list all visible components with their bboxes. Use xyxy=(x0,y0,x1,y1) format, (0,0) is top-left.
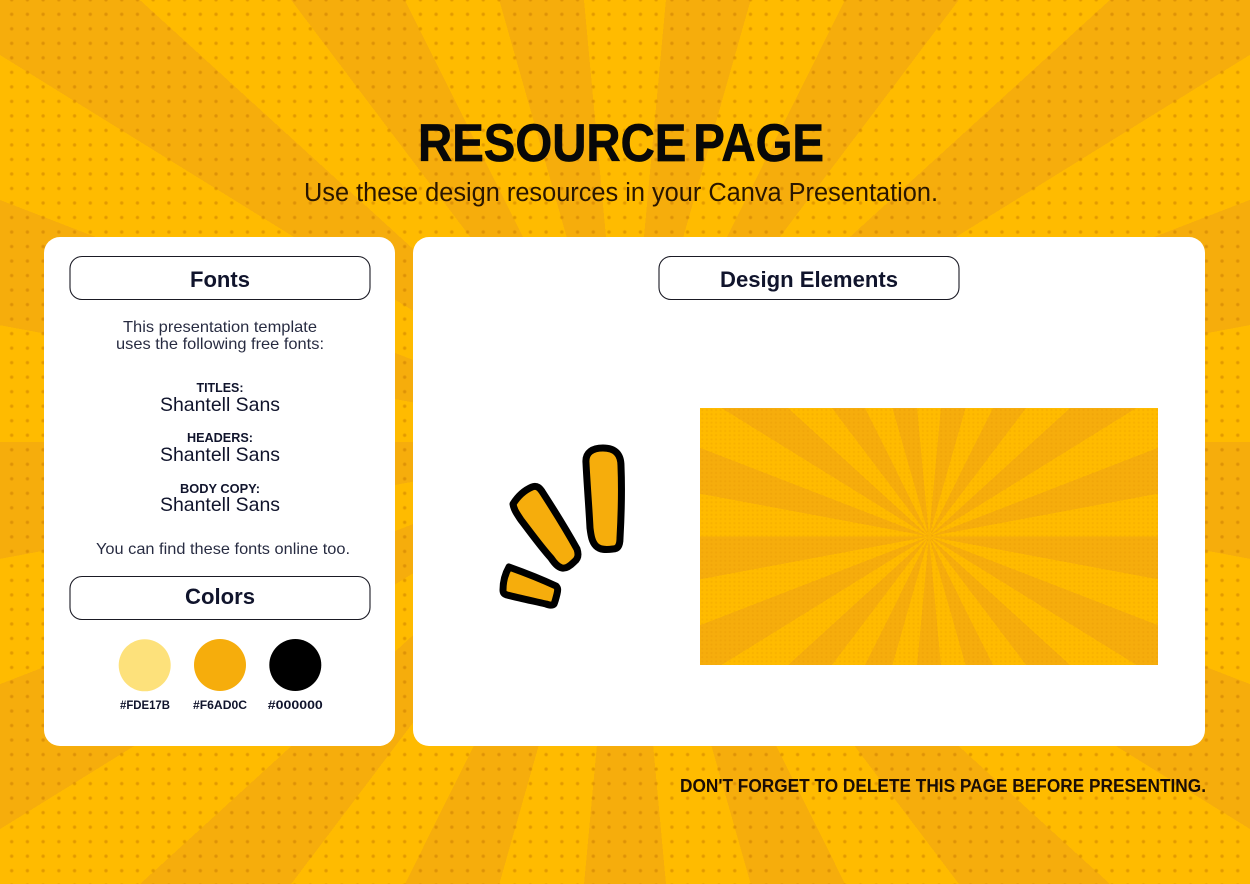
text: body copy font: Shantell Sans xyxy=(160,494,280,516)
text: titles font: Shantell Sans xyxy=(160,394,280,416)
title block xyxy=(304,114,938,207)
panel: fonts and colors xyxy=(44,237,395,746)
swatch: light yellow xyxy=(119,639,171,712)
heading: fonts: Fonts xyxy=(190,267,250,292)
text: titles font: TITLES: xyxy=(196,381,244,395)
text: fonts intro: This presentation template xyxy=(123,319,317,336)
swatch: orange xyxy=(193,639,247,712)
text: titles font xyxy=(160,381,280,416)
footer note: DON'T FORGET TO DELETE THIS PAGE BEFORE PRESENTING. xyxy=(680,776,1206,796)
sunburst design element xyxy=(700,408,1158,665)
heading: fonts xyxy=(70,256,370,300)
text: body copy font: BODY COPY: xyxy=(180,482,260,496)
swatch: black: #000000 xyxy=(268,700,323,712)
text: headers font: Shantell Sans xyxy=(160,444,280,466)
heading: colors: Colors xyxy=(185,584,255,609)
text: fonts note: You can find these fonts online too. xyxy=(96,541,350,558)
subtitle: Use these design resources in your Canva Presentation. xyxy=(304,179,938,207)
swatch: black xyxy=(268,639,323,712)
panel: design elements xyxy=(413,237,1205,746)
title: RESOURCE PAGE xyxy=(418,114,824,173)
swatch: orange: #F6AD0C xyxy=(193,700,247,712)
heading: design elements xyxy=(658,256,960,300)
swatch: light yellow: #FDE17B xyxy=(120,700,170,712)
heading: colors xyxy=(70,576,370,620)
text: headers font xyxy=(160,431,280,466)
text: body copy font xyxy=(160,482,280,516)
text: headers font: HEADERS: xyxy=(187,431,253,445)
text: fonts intro: uses the following free fonts: xyxy=(116,336,324,353)
heading: design elements: Design Elements xyxy=(720,267,898,292)
icon: hand-drawn burst marks xyxy=(500,444,625,609)
text: fonts intro xyxy=(116,319,324,353)
